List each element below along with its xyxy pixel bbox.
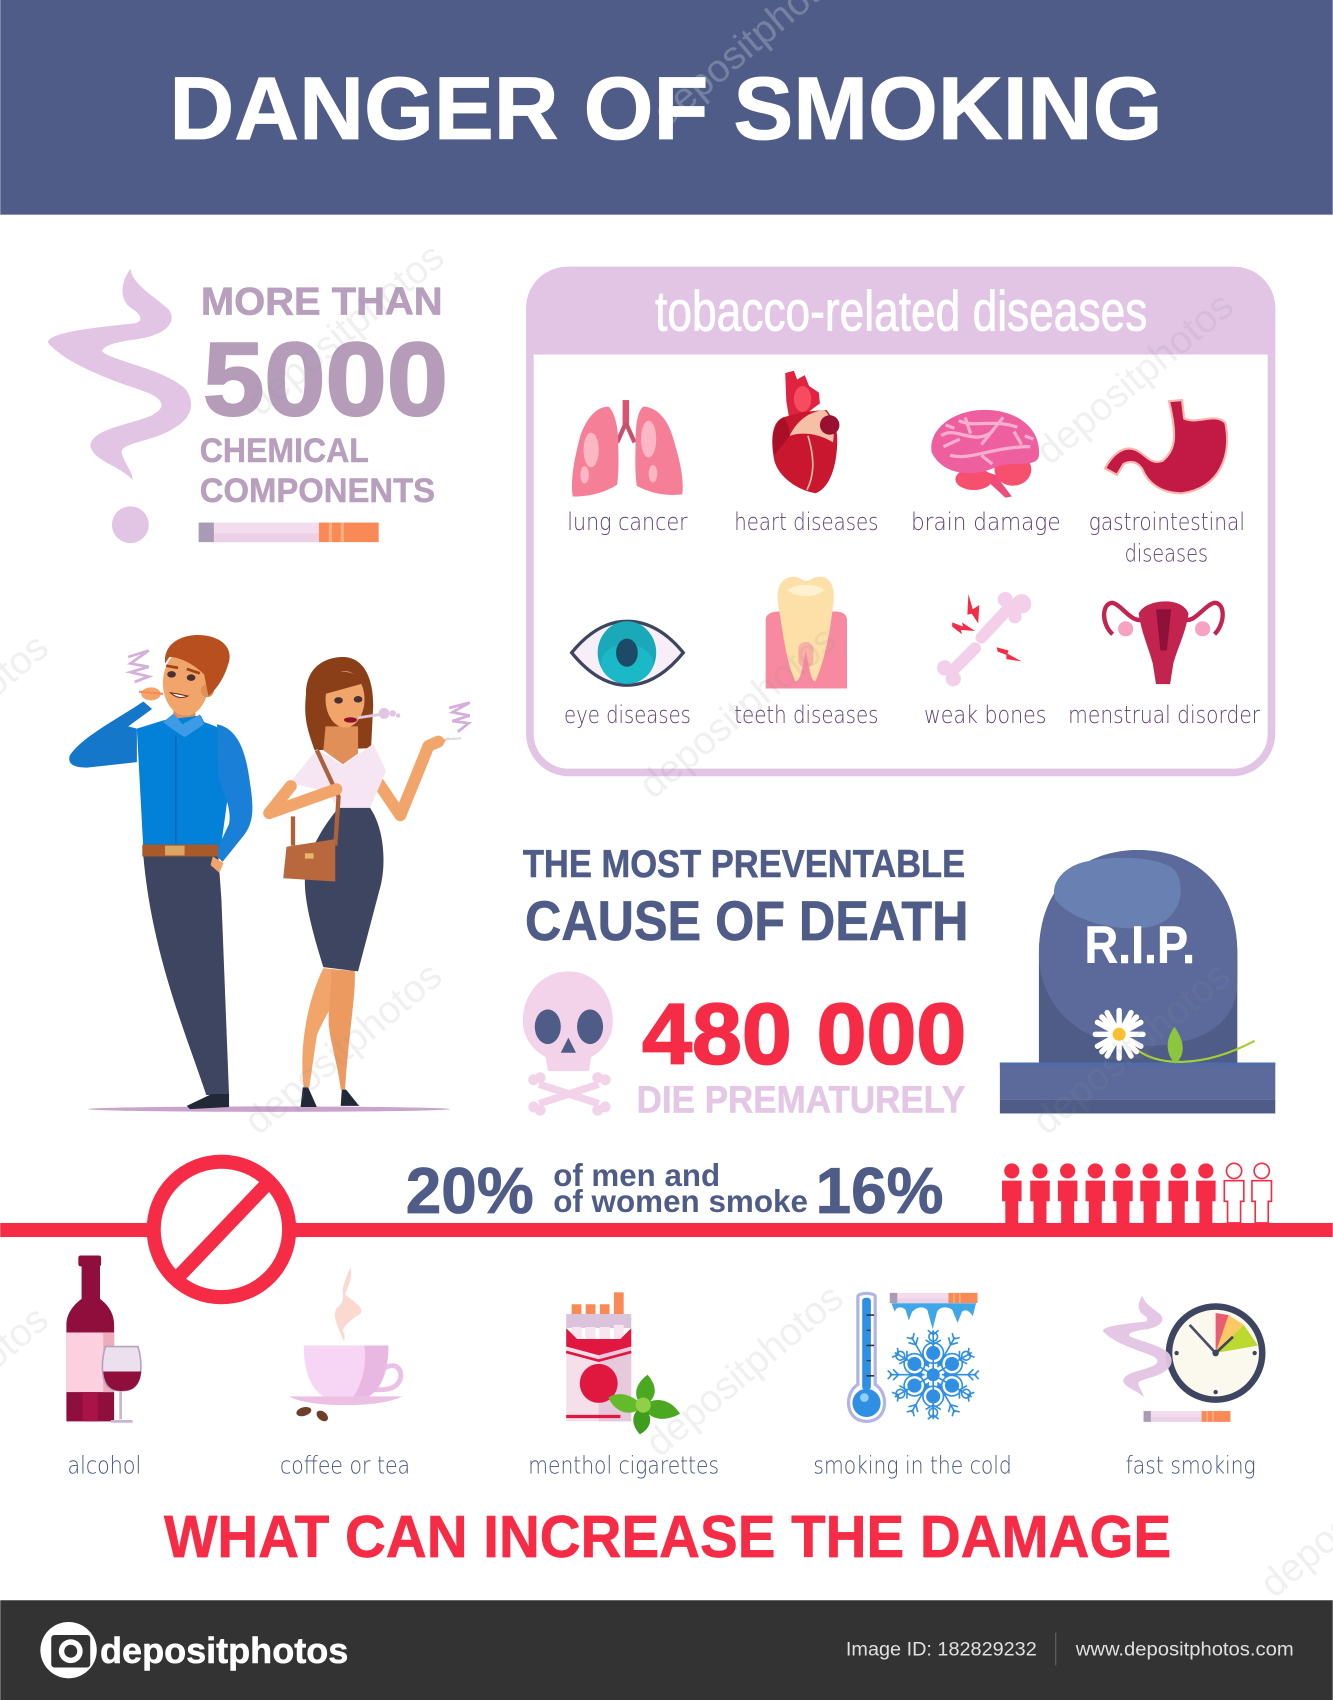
disease labels [564, 508, 1260, 729]
website: www.depositphotos.com [1075, 1639, 1294, 1661]
watermarks: depositphotos [638, 1276, 851, 1465]
pictogram: ten people, eight filled [1002, 1163, 1271, 1223]
watermarks: depositphotos [631, 618, 845, 807]
icon: menthol cigarette pack [566, 1292, 680, 1434]
more than label: MORE THAN [201, 280, 443, 323]
bottom heading: WHAT CAN INCREASE THE DAMAGE [164, 1503, 1171, 1570]
damage factor labels [67, 1451, 1256, 1479]
icon: cup of coffee or tea [289, 1266, 403, 1423]
icon: broken bone [937, 592, 1031, 686]
icon: stomach [1105, 400, 1227, 493]
disease labels: heart diseases [734, 508, 878, 536]
illustration: tombstone [1000, 850, 1275, 1113]
man figure [69, 635, 252, 1109]
icon: cigarette [199, 523, 379, 542]
disease labels: brain damage [911, 508, 1061, 536]
icon: brain [931, 410, 1039, 498]
watermarks: depositphotos [1028, 284, 1242, 473]
icon: clock with smoke and cigarette [1103, 1296, 1262, 1422]
title: DANGER OF SMOKING [169, 59, 1163, 158]
header banner [0, 0, 1333, 215]
thermometer [849, 1293, 885, 1421]
illustration: man and woman smoking [69, 635, 470, 1112]
disease labels: diseases [1125, 540, 1208, 568]
icon: eye [572, 621, 683, 685]
statistic caption: of men and [553, 1158, 720, 1193]
damage factor labels: smoking in the cold [813, 1451, 1012, 1479]
panel: tobacco-related diseases [526, 267, 1275, 772]
smokers statistic: of women smoke [553, 1184, 808, 1219]
frozen cigarette [890, 1293, 977, 1303]
ground shadow [88, 1106, 450, 1112]
icon: daisy with stem [1095, 1010, 1255, 1064]
icon: smoke exclamation mark [48, 269, 191, 543]
disease labels: weak bones [924, 701, 1047, 729]
snowflake [881, 1329, 985, 1421]
chemical components block: COMPONENTS [200, 472, 435, 510]
16 percent: 16% [816, 1154, 944, 1227]
image id: Image ID: 182829232 [846, 1639, 1037, 1661]
icon: heart [772, 371, 839, 493]
damage factor labels: coffee or tea [280, 1451, 410, 1479]
icon: thermometer and frozen cigarette with snowflake [849, 1293, 985, 1421]
disease labels: eye diseases [564, 701, 691, 729]
icon: uterus [1104, 601, 1223, 684]
watermarks: depositphotos [1025, 954, 1238, 1143]
die prematurely label: DIE PREMATURELY [637, 1079, 965, 1121]
number 480 000: 480 000 [642, 986, 966, 1083]
damage factor labels: menthol cigarettes [528, 1451, 719, 1479]
preventable death block: CAUSE OF DEATH [525, 890, 968, 952]
woman figure [269, 657, 470, 1107]
disease labels: teeth diseases [734, 701, 878, 729]
icon: tooth [766, 577, 847, 688]
footer bar [0, 1600, 1333, 1700]
damage factor labels: fast smoking [1126, 1451, 1256, 1479]
preventable death block [523, 843, 968, 1121]
watermarks: depositphotos [239, 235, 452, 424]
chemical components label: CHEMICAL [200, 432, 369, 470]
smokers statistic [406, 1154, 944, 1227]
icon: camera logo [40, 1622, 97, 1678]
icon: skull and crossbones [523, 971, 613, 1116]
watermarks: depositphotos [236, 954, 450, 1143]
20 percent: 20% [406, 1154, 534, 1227]
brand name: depositphotos [100, 1631, 348, 1671]
icon: prohibition sign [154, 1162, 289, 1297]
icon: lungs [572, 400, 683, 497]
disease labels: menstrual disorder [1068, 701, 1260, 729]
damage factor labels: alcohol [67, 1451, 141, 1479]
R.I.P. text: R.I.P. [1084, 916, 1195, 975]
heading: THE MOST PREVENTABLE [523, 843, 965, 886]
disease labels: gastrointestinal [1089, 508, 1245, 536]
panel heading: tobacco-related diseases [655, 280, 1147, 343]
disease labels: lung cancer [567, 508, 688, 536]
icon: wine bottle and glass [66, 1255, 141, 1421]
chemical components block [48, 269, 448, 543]
red divider line [0, 1223, 1333, 1237]
number 5000: 5000 [203, 322, 448, 438]
